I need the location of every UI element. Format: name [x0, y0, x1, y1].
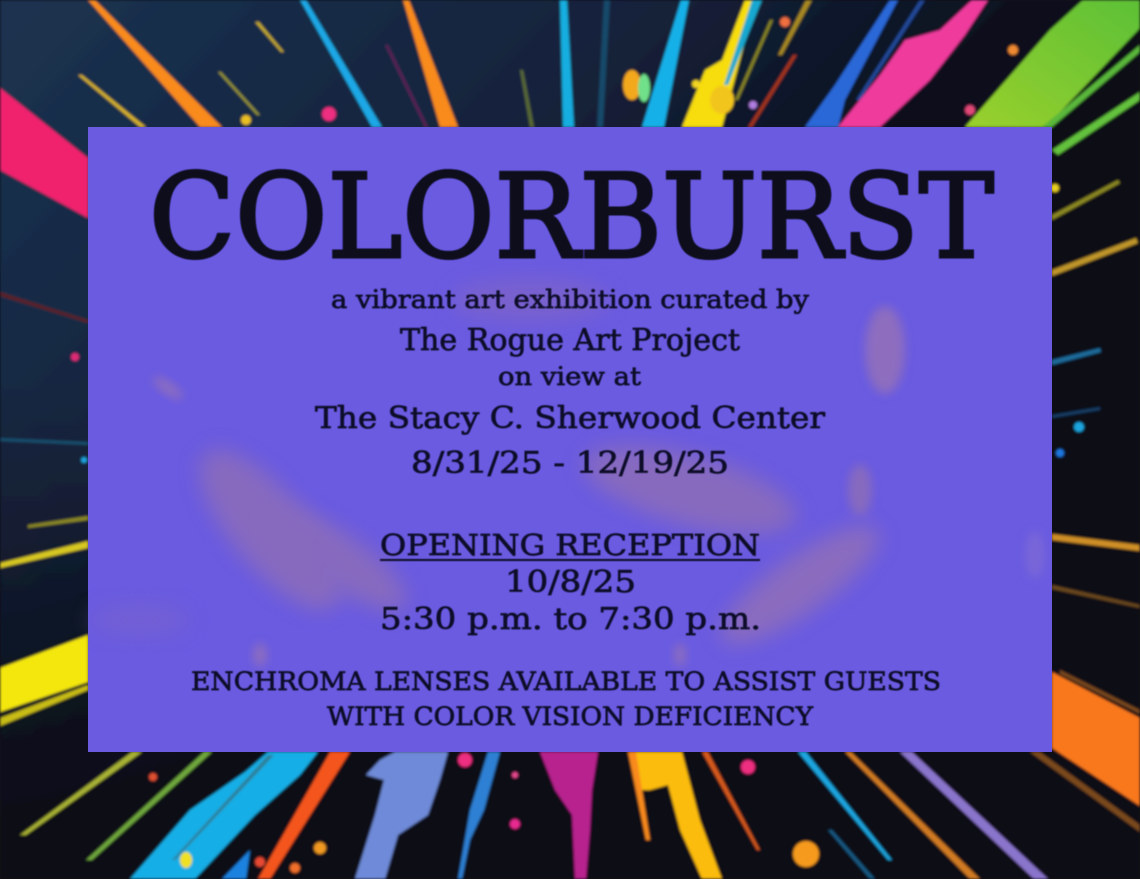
exhibition description: a vibrant art exhibition curated by: [331, 285, 810, 314]
exhibition description: The Stacy C. Sherwood Center: [315, 401, 826, 436]
opening reception details: 10/8/25: [505, 565, 636, 600]
exhibition description: on view at: [498, 362, 641, 391]
rays: top edge: [78, 0, 1140, 155]
accessibility note: ENCHROMA LENSES AVAILABLE TO ASSIST GUESTS: [191, 667, 941, 696]
exhibition description: The Rogue Art Project: [400, 323, 740, 358]
accessibility note: WITH COLOR VISION DEFICIENCY: [327, 702, 814, 731]
panel brush texture: [90, 278, 1045, 667]
opening reception details: [380, 528, 761, 637]
opening reception details: 5:30 p.m. to 7:30 p.m.: [380, 602, 761, 637]
accessibility note: [191, 667, 941, 731]
opening reception details: OPENING RECEPTION: [380, 528, 760, 562]
exhibition description: [315, 285, 826, 481]
title: COLORBURST: [149, 150, 994, 285]
rays: bottom edge: [20, 752, 1048, 879]
panel: exhibition details: [88, 127, 1052, 752]
exhibition description: 8/31/25 - 12/19/25: [411, 446, 729, 481]
